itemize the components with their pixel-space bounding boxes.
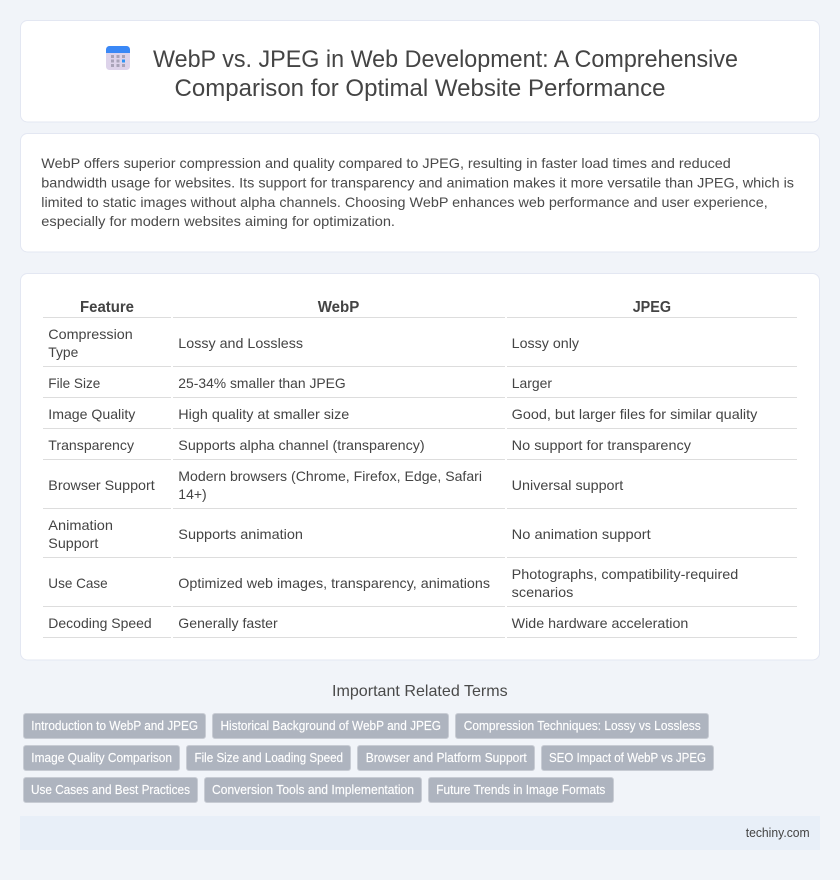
tag (186, 746, 350, 770)
row: compression type: Compression (48, 326, 133, 342)
summary text: limited to static images without alpha channels. Choosing WebP enhances web performance and user experience, (41, 194, 768, 210)
tags: related terms (24, 714, 714, 802)
row: compression type: Lossy only (512, 335, 579, 351)
row: image quality (48, 406, 757, 422)
title: WebP vs. JPEG in Web Development: A Comprehensive (153, 46, 738, 73)
footer: techiny.com (746, 826, 810, 840)
tag: Historical Background of WebP and JPEG (220, 719, 441, 733)
row: use case: Photographs, compatibility-required (512, 566, 738, 582)
row: animation support: Support (48, 535, 98, 551)
summary text: bandwidth usage for websites. Its support for transparency and animation makes it more versatile than JPEG, which is (41, 174, 794, 190)
row: file size: File Size (48, 375, 101, 391)
row: file size: 25-34% smaller than JPEG (178, 375, 346, 391)
table header row (80, 299, 671, 316)
tag (456, 714, 708, 738)
tag: Compression Techniques: Lossy vs Lossless (464, 719, 701, 733)
row: animation support (48, 517, 651, 551)
row: decoding speed: Wide hardware acceleration (512, 615, 688, 631)
heading: related terms: Important Related Terms (332, 683, 508, 700)
row: browser support: Browser Support (48, 477, 155, 493)
table header row: JPEG (633, 299, 671, 316)
tag (24, 714, 206, 738)
row: image quality: Good, but larger files for similar quality (512, 406, 757, 422)
row: transparency: No support for transparency (512, 437, 691, 453)
row: compression type: Lossy and Lossless (178, 335, 303, 351)
panel: header (20, 20, 820, 122)
row: animation support: Animation (48, 517, 113, 533)
tag: SEO Impact of WebP vs JPEG (549, 751, 706, 765)
row: use case (48, 566, 738, 600)
tag: Conversion Tools and Implementation (212, 783, 414, 797)
row: file size: Larger (512, 375, 552, 391)
title: Comparison for Optimal Website Performance (174, 75, 666, 102)
row: file size (48, 375, 552, 391)
summary text: especially for modern websites aiming for optimization. (41, 213, 395, 229)
tag (358, 746, 534, 770)
tag: Introduction to WebP and JPEG (31, 719, 198, 733)
panel: summary (20, 134, 820, 252)
icon: calendar (106, 46, 130, 70)
row: browser support: Universal support (512, 477, 623, 493)
summary text: WebP offers superior compression and quality compared to JPEG, resulting in faster load times and reduced (41, 155, 731, 171)
table header row: Feature (80, 299, 134, 316)
row: decoding speed: Decoding Speed (48, 615, 152, 631)
tag (428, 778, 614, 802)
tag (24, 778, 198, 802)
table header row: WebP (318, 299, 359, 316)
footer (20, 816, 820, 850)
row: image quality: High quality at smaller size (178, 406, 350, 422)
tag: Use Cases and Best Practices (31, 783, 190, 797)
tag (24, 746, 180, 770)
row: transparency (48, 437, 691, 453)
title (153, 46, 738, 102)
panel: comparison table (20, 274, 820, 660)
row: transparency: Supports alpha channel (transparency) (178, 437, 425, 453)
tag (212, 714, 448, 738)
tag: File Size and Loading Speed (194, 751, 343, 765)
row: browser support: Modern browsers (Chrome, Firefox, Edge, Safari (178, 468, 482, 484)
row: browser support (48, 468, 623, 502)
tag (204, 778, 422, 802)
row: compression type (48, 326, 579, 360)
row: compression type: Type (48, 344, 79, 360)
row: animation support: No animation support (512, 526, 651, 542)
row: animation support: Supports animation (178, 526, 303, 542)
summary text (41, 155, 794, 229)
row: use case: Optimized web images, transparency, animations (178, 575, 490, 591)
tag: Future Trends in Image Formats (436, 783, 605, 797)
row: use case: Use Case (48, 575, 108, 591)
tag: Image Quality Comparison (31, 751, 172, 765)
row: decoding speed: Generally faster (178, 615, 278, 631)
tag: Browser and Platform Support (366, 751, 527, 765)
row: image quality: Image Quality (48, 406, 135, 422)
row: transparency: Transparency (48, 437, 134, 453)
row: use case: scenarios (512, 584, 573, 600)
row: browser support: 14+) (178, 486, 207, 502)
tag (542, 746, 714, 770)
row: decoding speed (48, 615, 688, 631)
